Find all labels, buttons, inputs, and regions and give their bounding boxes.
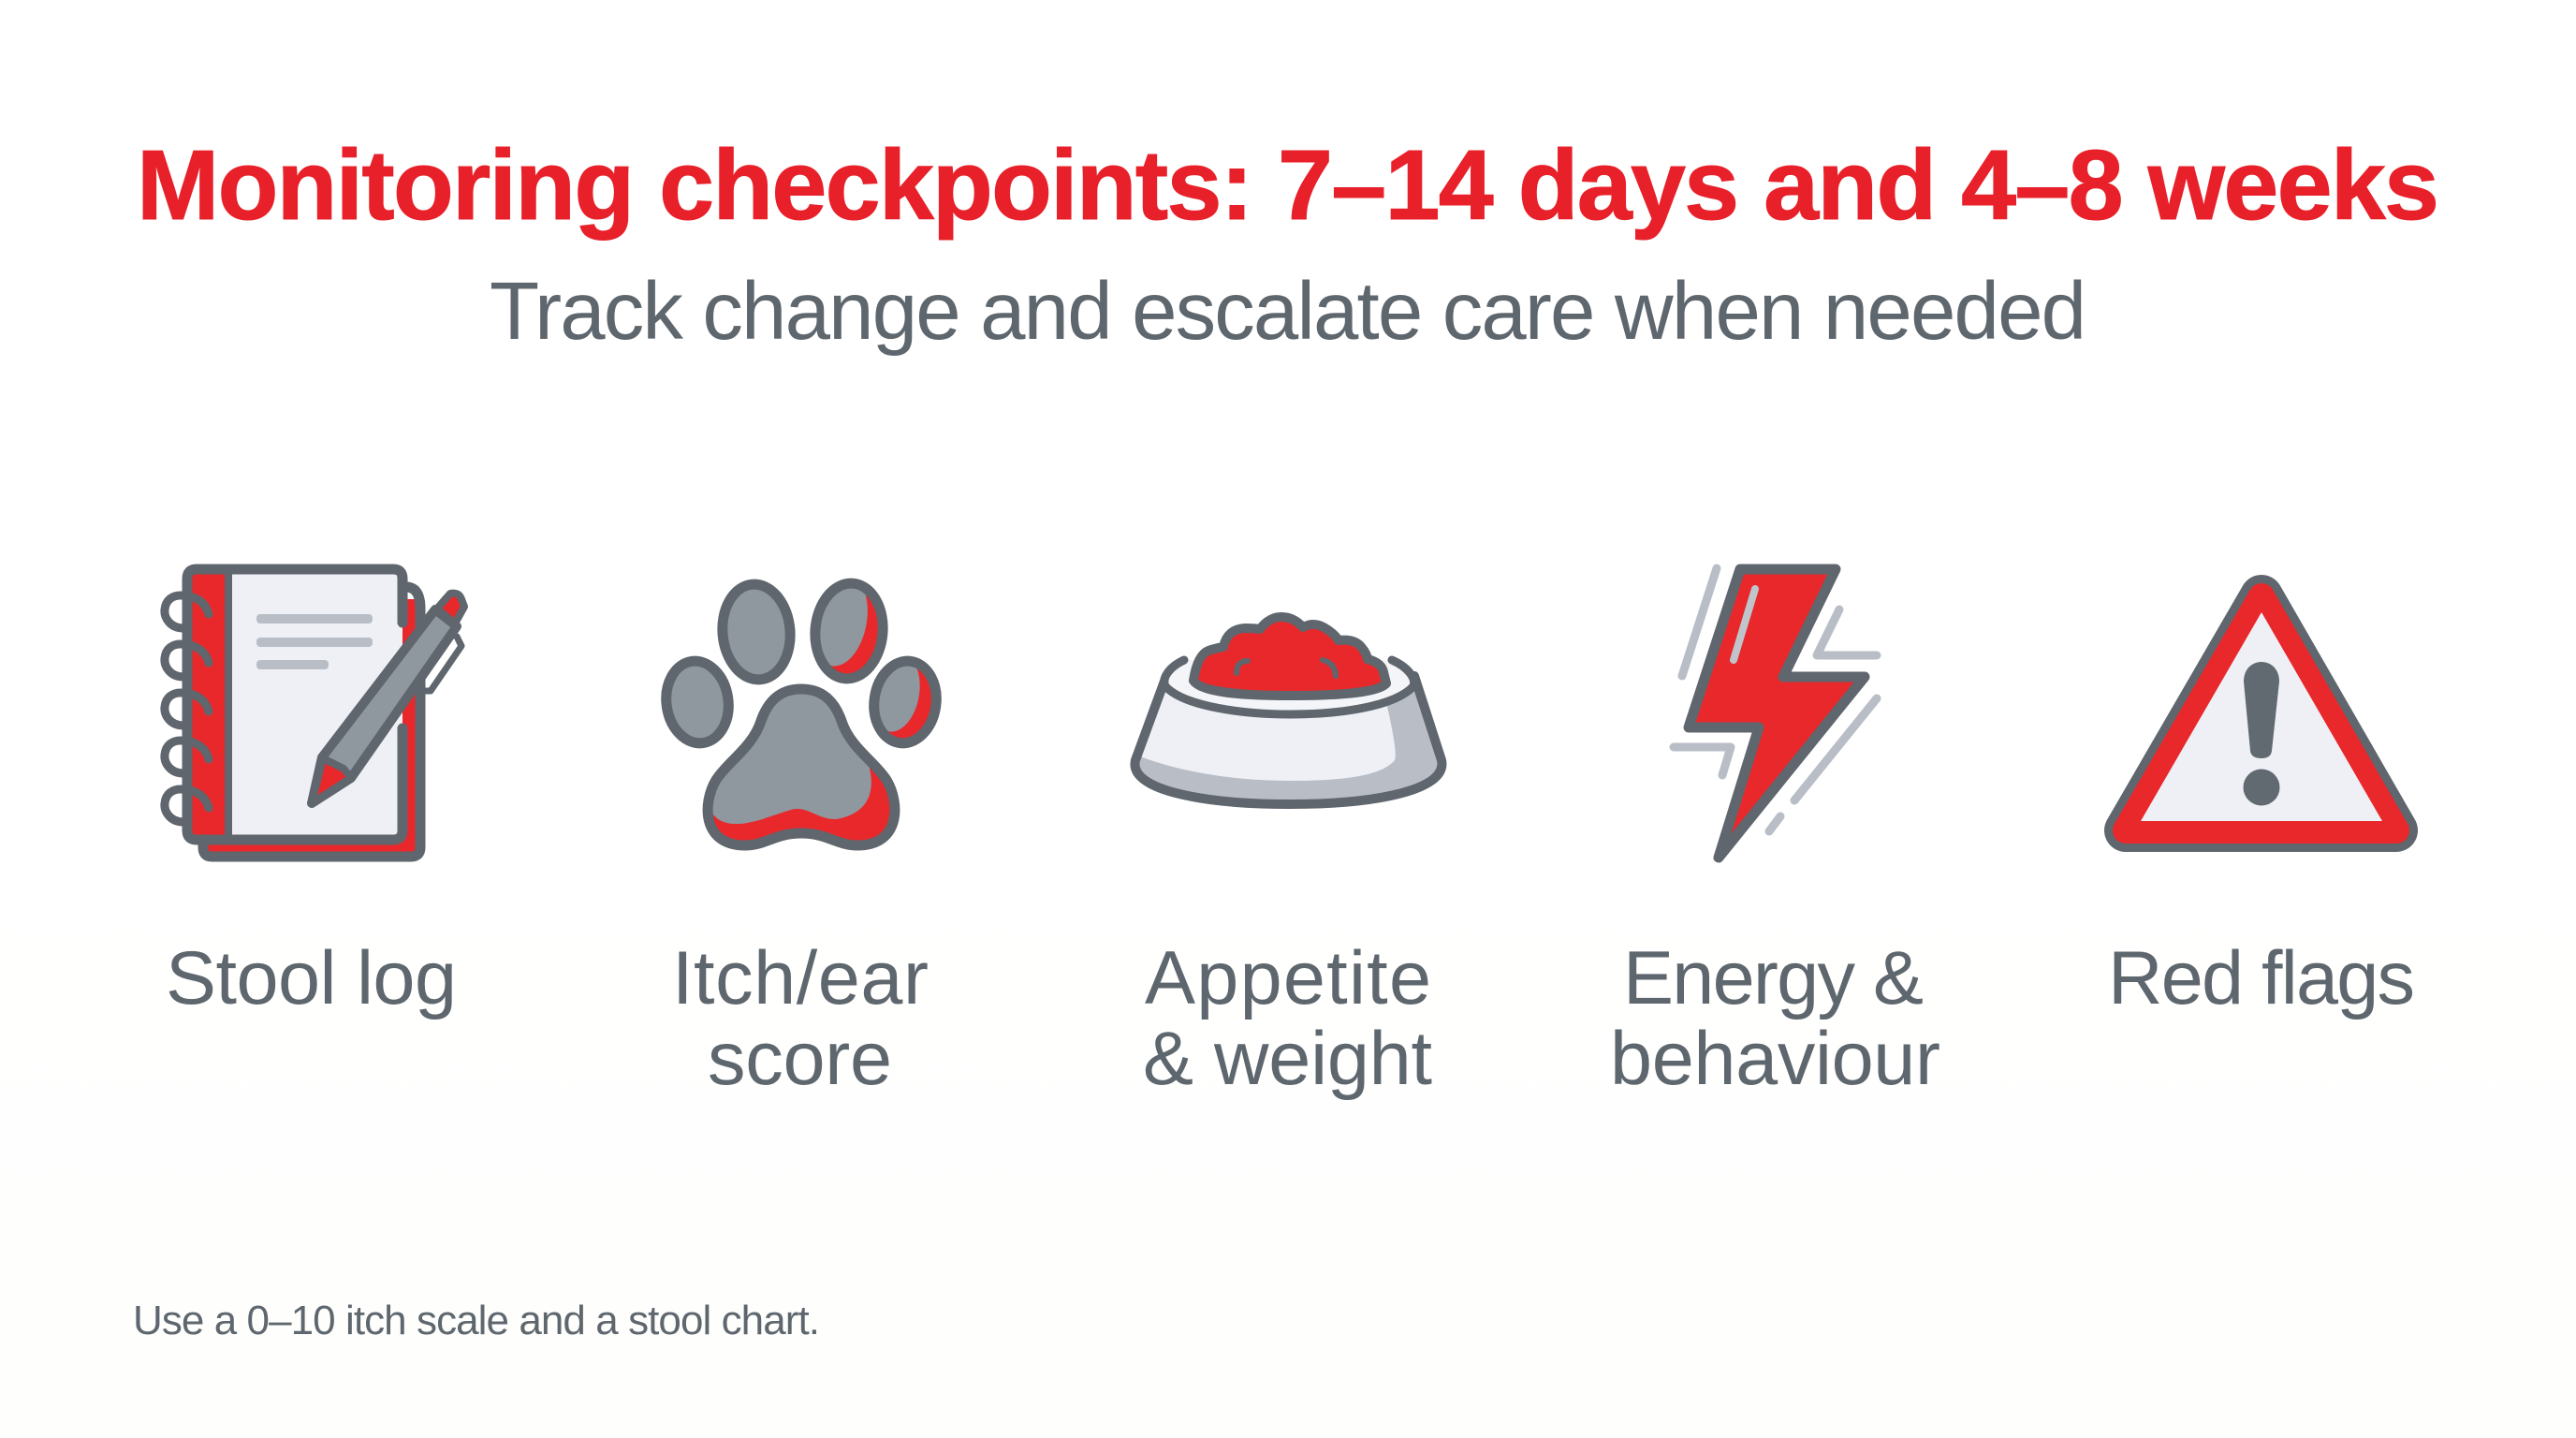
icon: food bowl <box>1134 617 1444 805</box>
label: appetite & weight: & weight <box>1143 1017 1432 1101</box>
subtitle: Track change and escalate care when needed <box>490 266 2086 357</box>
icon: lightning bolt <box>1674 568 1877 858</box>
label: itch/ear score: score <box>708 1017 892 1101</box>
icon: notebook and pen <box>165 569 464 857</box>
icon: warning triangle <box>2126 596 2396 830</box>
spiral rings <box>165 595 209 822</box>
title: Monitoring checkpoints: 7–14 days and 4–8 weeks <box>137 130 2439 241</box>
label: energy & behaviour: behaviour <box>1610 1017 1940 1101</box>
kibble <box>1193 617 1386 696</box>
pen <box>312 594 464 803</box>
label: itch/ear score: Itch/ear <box>672 936 929 1020</box>
notebook text lines <box>256 614 373 669</box>
label: stool log: Stool log <box>166 936 457 1020</box>
label: appetite & weight: Appetite <box>1145 936 1431 1020</box>
infographic canvas <box>136 146 2436 1335</box>
label: red flags: Red flags <box>2108 936 2415 1020</box>
label: energy & behaviour: Energy & <box>1623 936 1924 1020</box>
icon: paw print <box>661 569 942 845</box>
footnote: Use a 0–10 itch scale and a stool chart. <box>133 1298 820 1343</box>
